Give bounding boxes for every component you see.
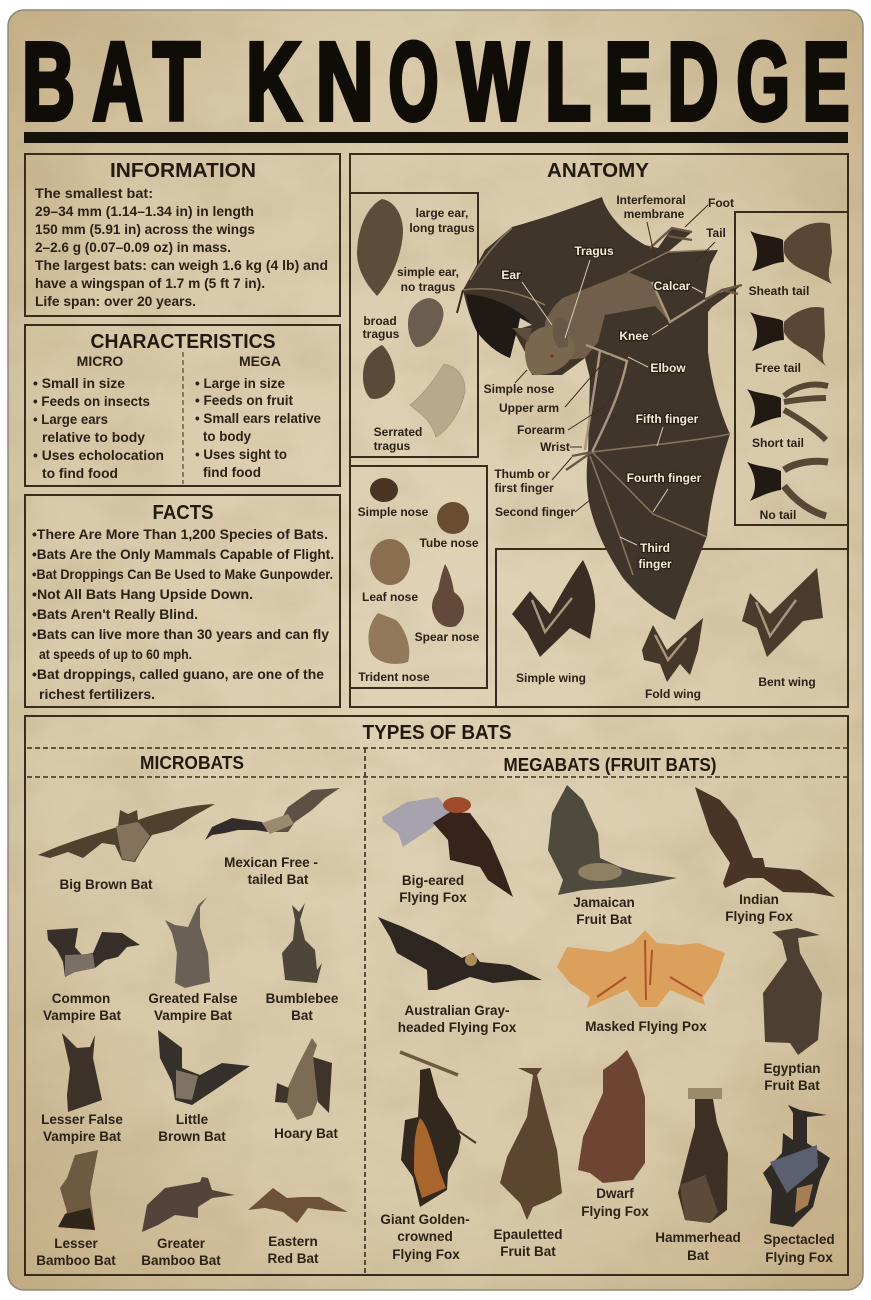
panel: nose types (350, 466, 487, 688)
icon: trident nose (368, 613, 409, 664)
title: O (388, 20, 438, 144)
heading: types of bats: TYPES OF BATS (362, 722, 512, 744)
information text: have a wingspan of 1.7 m (5 ft 7 in). (35, 276, 265, 291)
facts list: •Bats can live more than 30 years and can fly (32, 627, 329, 642)
ear labels: Serrated (374, 425, 422, 439)
tail labels: Short tail (752, 436, 804, 450)
facts list: •Not All Bats Hang Upside Down. (32, 587, 253, 602)
title: L (545, 20, 591, 144)
bat: giant golden-crowned: Flying Fox (392, 1247, 460, 1262)
icon: broad tragus (363, 345, 395, 399)
anatomy labels: Interfemoral (616, 193, 686, 207)
heading: anatomy: ANATOMY (547, 160, 650, 182)
bat: australian gray-headed: headed Flying Fox (398, 1020, 517, 1035)
information text: Life span: over 20 years. (35, 294, 196, 309)
title: E (604, 20, 652, 144)
title: T (153, 20, 200, 144)
bat: mexican free-tailed (205, 788, 340, 887)
bat: eastern red (248, 1188, 348, 1266)
bat: lesser false vampire: Vampire Bat (43, 1129, 122, 1144)
icon: simple wing (512, 560, 595, 657)
bat: common vampire: Common (52, 991, 110, 1006)
ear labels: no tragus (401, 280, 456, 294)
bat: common vampire: Vampire Bat (43, 1008, 122, 1023)
nose labels: Spear nose (415, 630, 480, 644)
wing labels: Fold wing (645, 687, 701, 701)
micro list: • Small in size (33, 376, 125, 391)
icon: sheath tail (750, 223, 832, 284)
column heading: micro: MICRO (77, 353, 123, 369)
bat: little brown: Brown Bat (158, 1129, 226, 1144)
bat: lesser bamboo: Bamboo Bat (36, 1253, 116, 1268)
panel: wing types (496, 549, 848, 707)
main bat diagram (457, 197, 742, 620)
icon: spear nose (432, 564, 464, 627)
bat: lesser false vampire (41, 1033, 123, 1144)
icon: free tail (750, 307, 826, 366)
wing labels: Simple wing (516, 671, 586, 685)
nose labels: Tube nose (419, 536, 479, 550)
facts list: •Bat Droppings Can Be Used to Make Gunpowder. (32, 567, 333, 582)
ear labels: long tragus (409, 221, 475, 235)
anatomy labels (484, 193, 734, 571)
information text: 2–2.6 g (0.07–0.09 oz) in mass. (35, 240, 231, 255)
bat: bumblebee: Bat (291, 1008, 313, 1023)
anatomy labels: Simple nose (484, 382, 555, 396)
bat: dwarf flying fox: Dwarf (596, 1186, 634, 1201)
panel: information (25, 154, 340, 316)
mega list: • Uses sight to (195, 447, 287, 462)
heading: information: INFORMATION (110, 160, 256, 182)
panel: tail types (735, 212, 848, 525)
micro list: • Large ears (33, 412, 108, 427)
panel: ear types (350, 193, 478, 457)
bat: indian flying fox: Indian (739, 892, 779, 907)
bat: common vampire (43, 928, 140, 1023)
bat: dwarf flying fox: Flying Fox (581, 1204, 649, 1219)
bat: lesser bamboo: Lesser (54, 1236, 99, 1251)
icon: serrated tragus (410, 364, 465, 437)
bat: greater bamboo: Greater (157, 1236, 206, 1251)
bat: hoary (274, 1038, 338, 1141)
bat: dwarf flying fox (578, 1050, 649, 1219)
mega list: • Small ears relative (195, 411, 321, 426)
bat: big-eared flying fox: Big-eared (402, 873, 464, 888)
bat: big brown: Big Brown Bat (60, 877, 153, 892)
micro list: relative to body (42, 430, 145, 445)
bat: masked flying fox (557, 930, 725, 1034)
title: B (22, 20, 75, 144)
anatomy labels: Tail (706, 226, 726, 240)
title: A (92, 20, 142, 144)
bat: egyptian fruit: Fruit Bat (764, 1078, 820, 1093)
icon: tube nose (437, 502, 469, 534)
bat: egyptian fruit (763, 928, 822, 1093)
bat: australian gray-headed: Australian Gray- (404, 1003, 510, 1018)
nose labels: Simple nose (358, 505, 429, 519)
anatomy labels: Second finger (495, 505, 575, 519)
micro list: • Uses echolocation (33, 448, 164, 463)
facts list: at speeds of up to 60 mph. (39, 647, 192, 662)
anatomy labels: Fifth finger (636, 412, 699, 426)
bat: mexican free-tailed: tailed Bat (248, 872, 309, 887)
bat: greater false vampire: Greated False (148, 991, 238, 1006)
anatomy labels: Foot (708, 196, 734, 210)
icon: simple ear (408, 298, 443, 347)
bat: giant golden-crowned: crowned (397, 1229, 453, 1244)
title: G (736, 20, 790, 144)
icon: simple nose (370, 478, 398, 502)
anatomy labels: membrane (624, 207, 685, 221)
facts list (32, 527, 334, 702)
anatomy labels: Thumb or (494, 467, 550, 481)
bat: spectacled flying fox: Spectacled (763, 1232, 835, 1247)
bat: indian flying fox: Flying Fox (725, 909, 793, 924)
title: D (668, 20, 718, 144)
heading: microbats: MICROBATS (140, 753, 244, 773)
ear labels: simple ear, (397, 265, 459, 279)
nose labels: Leaf nose (362, 590, 418, 604)
bat: greater bamboo: Bamboo Bat (141, 1253, 221, 1268)
bat: bumblebee: Bumblebee (266, 991, 339, 1006)
mega list: find food (203, 465, 261, 480)
bat: mexican free-tailed: Mexican Free - (224, 855, 318, 870)
panel: characteristics (25, 325, 340, 486)
bat: jamaican fruit: Jamaican (573, 895, 635, 910)
nose labels: Trident nose (358, 670, 430, 684)
panel: types of bats (25, 716, 848, 1275)
anatomy labels: Wrist (540, 440, 570, 454)
tail labels: No tail (760, 508, 796, 522)
mega list: to body (203, 429, 251, 444)
mega list: • Feeds on fruit (195, 393, 294, 408)
bat: epauletted fruit (493, 1068, 563, 1259)
bat: giant golden-crowned: Giant Golden- (380, 1212, 470, 1227)
micro list: to find food (42, 466, 118, 481)
tail labels: Free tail (755, 361, 801, 375)
title: N (316, 20, 374, 144)
icon: short tail (747, 384, 828, 440)
anatomy labels: Ear (501, 268, 521, 282)
title rule (24, 132, 848, 143)
bat: little brown: Little (176, 1112, 209, 1127)
ear labels: large ear, (416, 206, 468, 220)
title: K (246, 20, 301, 144)
panel: facts (25, 495, 340, 707)
information text: 150 mm (5.91 in) across the wings (35, 222, 255, 237)
tail labels (749, 284, 809, 522)
panel: anatomy (350, 154, 848, 707)
anatomy labels: first finger (494, 481, 554, 495)
bat: hammerhead: Hammerhead (655, 1230, 741, 1245)
facts list: •Bats Are the Only Mammals Capable of Flight. (32, 547, 334, 562)
ear labels: tragus (363, 327, 400, 341)
bat: spectacled flying fox: Flying Fox (765, 1250, 833, 1265)
bat: little brown (158, 1030, 250, 1144)
wing labels: Bent wing (758, 675, 816, 689)
mega list: • Large in size (195, 376, 285, 391)
heading: megabats: MEGABATS (FRUIT BATS) (504, 755, 716, 775)
icon: leaf nose (370, 539, 410, 585)
bat: big brown (38, 804, 215, 892)
bat: jamaican fruit (548, 785, 677, 927)
bat: giant golden-crowned (380, 1052, 476, 1262)
information text: The smallest bat: (35, 186, 153, 201)
anatomy labels: Upper arm (499, 401, 559, 415)
anatomy labels: Calcar (654, 279, 691, 293)
column heading: mega: MEGA (239, 353, 281, 369)
facts list: •There Are More Than 1,200 Species of Bats. (32, 527, 328, 542)
tail labels: Sheath tail (749, 284, 809, 298)
anatomy labels: Tragus (574, 244, 614, 258)
ear labels: broad (363, 314, 397, 328)
wing labels (516, 671, 816, 701)
heading: characteristics: CHARACTERISTICS (90, 331, 276, 353)
facts list: •Bats Aren't Really Blind. (32, 607, 198, 622)
anatomy labels: Elbow (650, 361, 686, 375)
bat: big-eared flying fox: Flying Fox (399, 890, 467, 905)
ear labels: tragus (374, 439, 411, 453)
bat: indian flying fox (695, 787, 835, 924)
anatomy labels: Fourth finger (627, 471, 702, 485)
information text (35, 186, 328, 309)
bat: jamaican fruit: Fruit Bat (576, 912, 632, 927)
title (22, 20, 850, 144)
ear labels (363, 206, 475, 453)
facts list: •Bat droppings, called guano, are one of the (32, 667, 324, 682)
bat: greater bamboo (141, 1177, 235, 1268)
heading: facts: FACTS (152, 502, 214, 524)
facts list: richest fertilizers. (39, 687, 155, 702)
bat: eastern red: Eastern (268, 1234, 318, 1249)
icon: fold wing (642, 618, 703, 682)
bat: eastern red: Red Bat (267, 1251, 319, 1266)
bat: hammerhead: Bat (687, 1248, 709, 1263)
bat: lesser bamboo (36, 1150, 116, 1268)
information text: 29–34 mm (1.14–1.34 in) in length (35, 204, 254, 219)
bat: egyptian fruit: Egyptian (763, 1061, 821, 1076)
anatomy labels: Third (640, 541, 670, 555)
bat: hoary: Hoary Bat (274, 1126, 338, 1141)
icon: bent wing (742, 568, 823, 657)
icon: no tail (747, 461, 828, 516)
bat: bumblebee (266, 903, 339, 1023)
micro list (33, 376, 164, 481)
anatomy labels: Forearm (517, 423, 565, 437)
micro list: • Feeds on insects (33, 394, 150, 409)
bat: epauletted fruit: Fruit Bat (500, 1244, 556, 1259)
bat: hammerhead (655, 1088, 741, 1263)
bat: greater false vampire: Vampire Bat (154, 1008, 233, 1023)
bat: epauletted fruit: Epauletted (493, 1227, 563, 1242)
bat: masked flying fox: Masked Flying Pox (585, 1019, 707, 1034)
mega list (195, 376, 321, 480)
title: W (458, 20, 529, 144)
nose labels (358, 505, 480, 684)
information text: The largest bats: can weigh 1.6 kg (4 lb) and (35, 258, 328, 273)
bat: greater false vampire (148, 897, 238, 1023)
anatomy labels: Knee (619, 329, 649, 343)
bat: lesser false vampire: Lesser False (41, 1112, 123, 1127)
bat: australian gray-headed (378, 917, 542, 1035)
icon: large ear (357, 199, 403, 296)
bat: big-eared flying fox (382, 797, 513, 905)
anatomy labels: finger (638, 557, 672, 571)
bat: spectacled flying fox (763, 1105, 835, 1265)
